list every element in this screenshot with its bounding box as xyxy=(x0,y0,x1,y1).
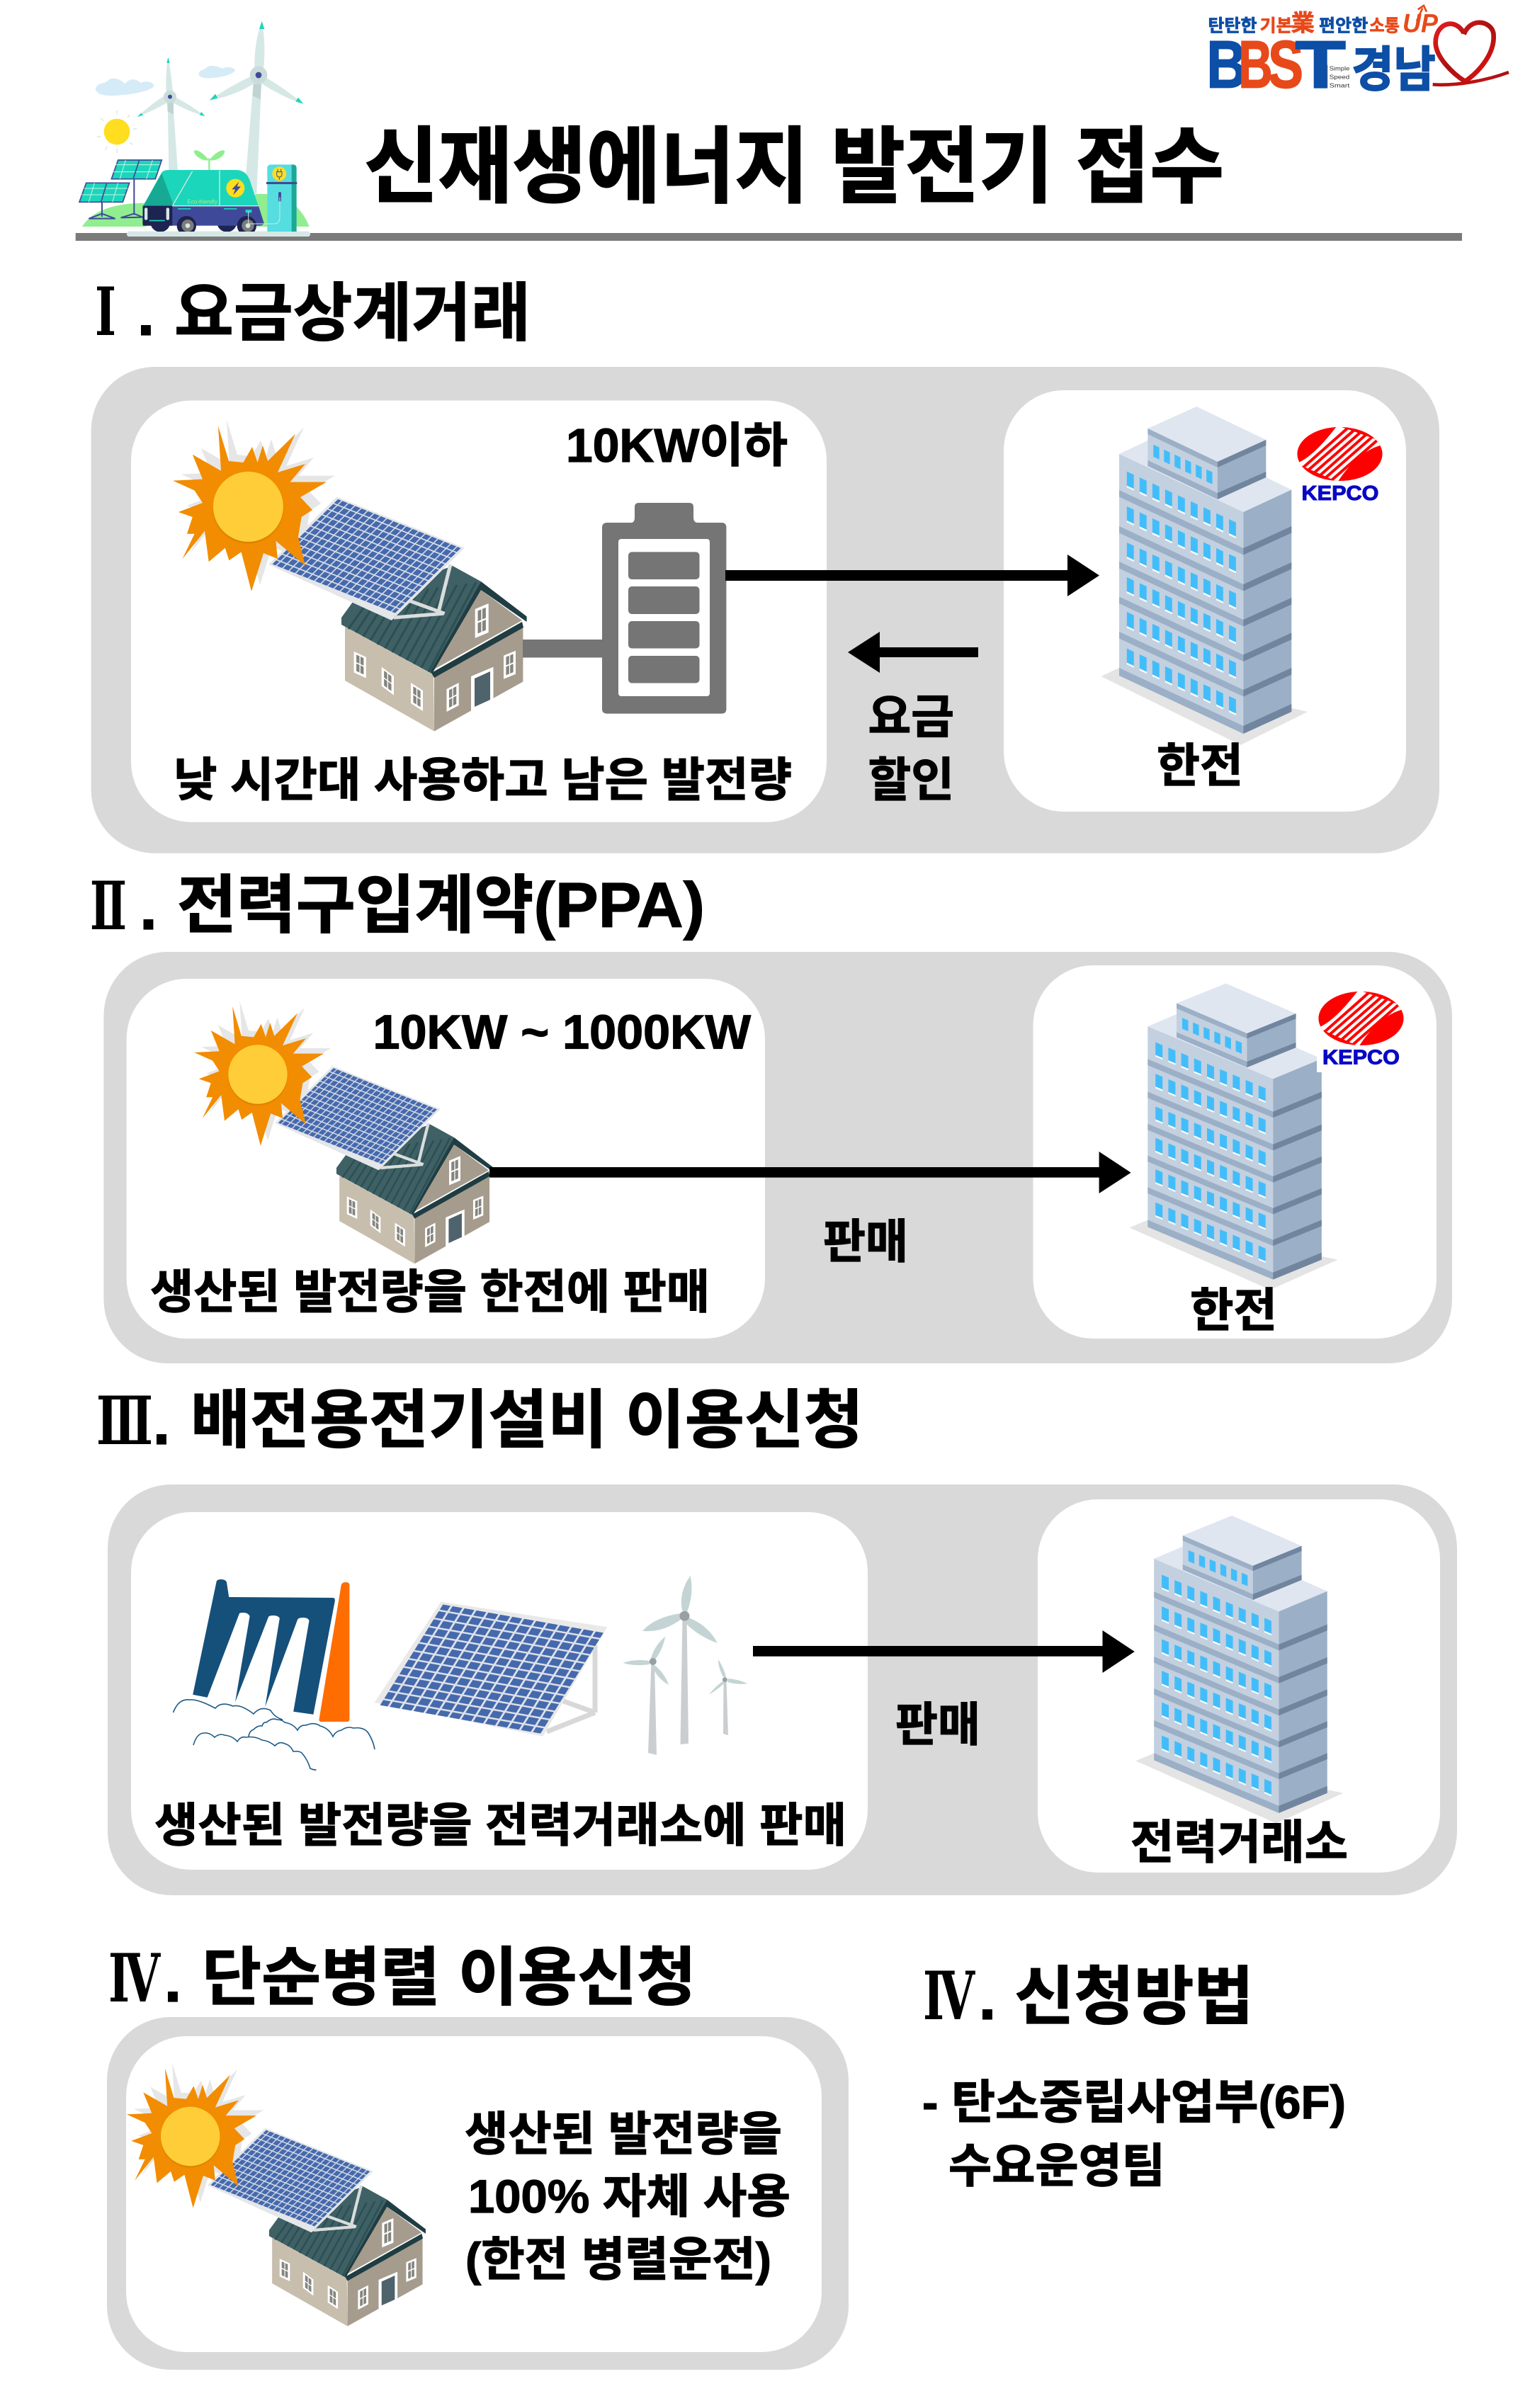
logo slogan: 편안한 xyxy=(1319,16,1368,36)
heading: section 4: 단순병렬 이용신청 xyxy=(202,1943,696,2014)
heading: section 2: 전력구입계약(PPA) xyxy=(177,870,705,941)
icon: battery xyxy=(602,503,726,714)
label: sale: 판매 xyxy=(823,1215,908,1268)
heading: how to apply: . xyxy=(979,1963,997,2033)
logo: KEPCO: KEPCO xyxy=(1302,482,1378,505)
ground platform xyxy=(127,232,310,236)
heading: section 1: Ⅰ xyxy=(95,273,116,351)
icon: hydro dam xyxy=(174,1579,375,1770)
logo wordmark BBST: B xyxy=(1238,27,1273,102)
logo slogan: 業 xyxy=(1291,9,1315,35)
label: bill discount xyxy=(868,691,954,806)
card: generation side xyxy=(131,401,827,822)
icon: sun and solar house xyxy=(127,2063,426,2326)
card: self consumption xyxy=(126,2036,822,2352)
icon: wind turbines xyxy=(623,1576,748,1755)
panel: simple parallel application xyxy=(107,2017,849,2370)
heading: how to apply xyxy=(923,1958,1254,2035)
logo arrow xyxy=(1417,6,1427,21)
title rule xyxy=(76,233,1462,241)
logo wordmark BBST: S xyxy=(1268,27,1303,102)
arrow: bill discount back xyxy=(848,632,978,673)
logo wordmark BBST: B xyxy=(1206,27,1247,102)
logo: KEPCO: KEPCO xyxy=(1322,1047,1400,1069)
icon: sprout xyxy=(194,150,225,171)
panel background xyxy=(107,2017,849,2370)
logo heart ribbon xyxy=(1433,23,1509,85)
icon: electric vehicle xyxy=(142,170,264,235)
logo tagline: Simple xyxy=(1330,65,1350,72)
heading: section 1: 요금상계거래 xyxy=(174,278,531,349)
logo slogan: 기본 xyxy=(1260,16,1293,36)
panel background xyxy=(108,1484,1457,1895)
contact text xyxy=(922,2076,1346,2192)
logo slogan: 소통 xyxy=(1369,17,1400,36)
caption: sell to power exchange: 생산된 발전량을 전력거래소에 판매 xyxy=(154,1799,846,1851)
icon: sun and solar house xyxy=(173,419,527,731)
logo backing patch xyxy=(1317,1056,1322,1072)
connector house to battery xyxy=(523,640,604,657)
logo: KEPCO xyxy=(1291,422,1390,505)
arrow: surplus power to KEPCO xyxy=(725,555,1099,596)
heading: section 4: . xyxy=(164,1945,182,2016)
icon: sun and solar house xyxy=(194,1001,492,1263)
heading: section 4: Ⅳ xyxy=(108,1940,161,2018)
card: exchange side xyxy=(1038,1499,1440,1873)
logo wordmark BBST xyxy=(1206,27,1346,102)
contact text: - 탄소중립사업부(6F) xyxy=(922,2076,1346,2128)
heading: section 1: . xyxy=(137,278,155,349)
description: 생산된 발전량을 xyxy=(465,2108,782,2160)
card: KEPCO side xyxy=(1004,390,1406,812)
platform overlay on rule xyxy=(127,232,310,237)
logo: BBST Gyeongnam xyxy=(1206,6,1509,102)
logo tagline xyxy=(1327,65,1350,89)
arrow: sale to KEPCO xyxy=(489,1152,1131,1193)
icon: solar panel xyxy=(375,1602,607,1737)
logo region name: 경남 xyxy=(1352,43,1436,97)
icon: clouds xyxy=(96,66,235,96)
heading: section 3: . xyxy=(153,1387,171,1458)
label: KEPCO: 한전 xyxy=(1157,739,1243,792)
logo tagline: Smart xyxy=(1330,81,1350,89)
card: KEPCO side xyxy=(1033,965,1436,1339)
icon: green hills xyxy=(82,194,310,227)
logo tagline: Speed xyxy=(1330,74,1350,81)
panel background xyxy=(91,367,1439,853)
card: generation side xyxy=(127,979,765,1339)
heading: how to apply: Ⅳ xyxy=(923,1958,975,2035)
label: sale: 판매 xyxy=(895,1698,980,1751)
arrow: sale to power exchange xyxy=(753,1630,1135,1673)
icon: solar arrays xyxy=(79,160,162,219)
title: 신재생에너지 발전기 접수 xyxy=(364,120,1224,213)
heading: section 3: 배전용전기설비 이용신청 xyxy=(191,1385,863,1456)
caption: surplus generation: 낮 시간대 사용하고 남은 발전량 xyxy=(174,754,792,806)
capacity label: 10KW이하 xyxy=(566,419,788,472)
icon: sun xyxy=(97,110,137,153)
description xyxy=(465,2108,790,2285)
heading: section 3: Ⅲ xyxy=(96,1382,153,1460)
label: bill discount: 요금 xyxy=(868,691,954,743)
contact text: 수요운영팀 xyxy=(948,2140,1165,2192)
heading: section 2: Ⅱ xyxy=(90,868,127,945)
logo: KEPCO xyxy=(1312,987,1411,1069)
card: generation side xyxy=(131,1512,868,1870)
logo slogan: 탄탄한 xyxy=(1208,16,1257,36)
heading: section 2: . xyxy=(140,873,157,943)
caption: sell generated power: 생산된 발전량을 한전에 판매 xyxy=(150,1266,710,1318)
panel: net metering xyxy=(91,367,1439,853)
icon: small wind turbine xyxy=(137,57,205,170)
icon: KEPCO building xyxy=(1101,407,1308,745)
description: 100% 자체 사용 xyxy=(468,2170,790,2222)
icon: large wind turbine xyxy=(210,21,303,193)
heading: how to apply: 신청방법 xyxy=(1014,1962,1254,2033)
panel: power purchase agreement xyxy=(103,952,1452,1363)
header illustration: eco vehicle, turbines and solar xyxy=(79,21,310,236)
vehicle lettering: Eco-friendly xyxy=(187,198,218,205)
panel: distribution facility application xyxy=(108,1484,1457,1895)
icon: power exchange building xyxy=(1135,1516,1343,1823)
label: bill discount: 할인 xyxy=(868,754,954,806)
description: (한전 병렬운전) xyxy=(465,2233,771,2285)
logo wordmark BBST: T xyxy=(1295,27,1346,102)
logo slogan: UP xyxy=(1402,8,1439,38)
panel background xyxy=(103,952,1452,1363)
icon: charging station xyxy=(249,164,297,234)
icon: KEPCO building xyxy=(1129,984,1338,1290)
label: power exchange: 전력거래소 xyxy=(1130,1816,1348,1868)
logo slogan xyxy=(1208,8,1439,38)
capacity label: 10KW ~ 1000KW xyxy=(373,1006,752,1060)
label: KEPCO: 한전 xyxy=(1190,1284,1277,1336)
